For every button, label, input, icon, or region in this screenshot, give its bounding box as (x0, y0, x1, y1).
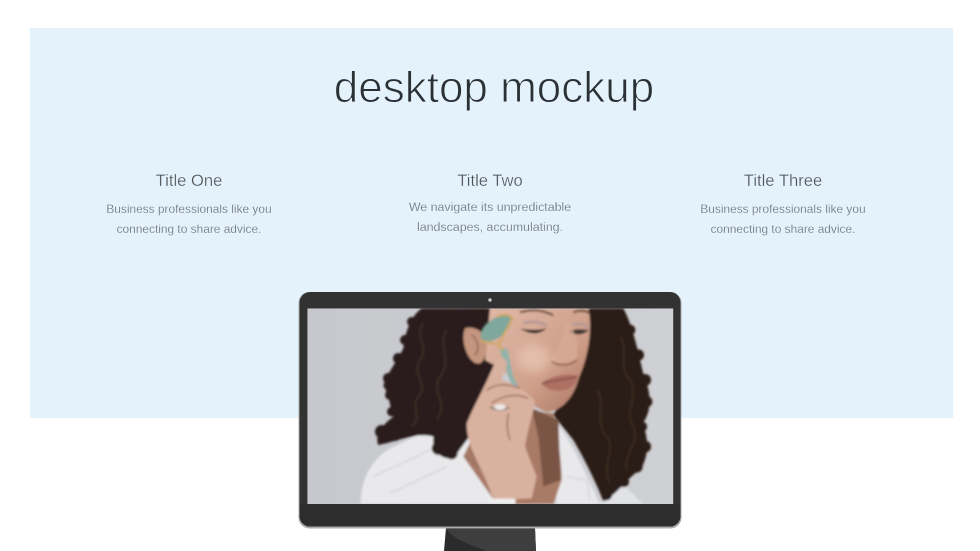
roller frame (481, 315, 512, 351)
shirt (361, 423, 600, 504)
text block: column two (409, 171, 571, 234)
body text: column two (409, 200, 571, 234)
heading: title three: Title Three (744, 171, 822, 190)
webcam dot (488, 298, 492, 302)
text block: column three (700, 171, 866, 236)
eyes (520, 328, 547, 333)
desktop monitor mockup (298, 292, 682, 551)
body text: column one: Business professionals like you (106, 202, 272, 216)
hair highlights (412, 323, 635, 483)
lips (541, 375, 577, 391)
ear (463, 328, 487, 364)
neck and chest (463, 407, 562, 504)
roller stone (480, 314, 512, 343)
body text: column one (106, 202, 272, 236)
screen photo: woman with facial roller (307, 308, 673, 504)
hair: right side (553, 308, 652, 502)
body text: column three: connecting to share advice. (711, 222, 855, 236)
panel: light blue background (30, 28, 953, 418)
face (485, 308, 590, 412)
body text: column three (700, 202, 866, 236)
brows (520, 310, 589, 315)
body text: column three: Business professionals like you (700, 202, 866, 216)
cheek light (517, 344, 550, 372)
ring (490, 407, 509, 410)
cuff (487, 499, 516, 504)
hair: left side (375, 308, 523, 459)
body text: column two: landscapes, accumulating. (417, 220, 563, 234)
monitor stand (444, 528, 536, 551)
eye lids (523, 322, 588, 327)
nose (556, 328, 577, 364)
title: desktop mockup (334, 63, 654, 112)
body text: column two: We navigate its unpredictable (409, 200, 571, 214)
roller handle (499, 347, 518, 388)
heading: title one: Title One (156, 171, 222, 190)
body text: column one: connecting to share advice. (117, 222, 261, 236)
monitor body (298, 292, 682, 528)
text block: column one (106, 171, 272, 236)
hand (467, 358, 537, 500)
heading: title two: Title Two (457, 171, 523, 190)
